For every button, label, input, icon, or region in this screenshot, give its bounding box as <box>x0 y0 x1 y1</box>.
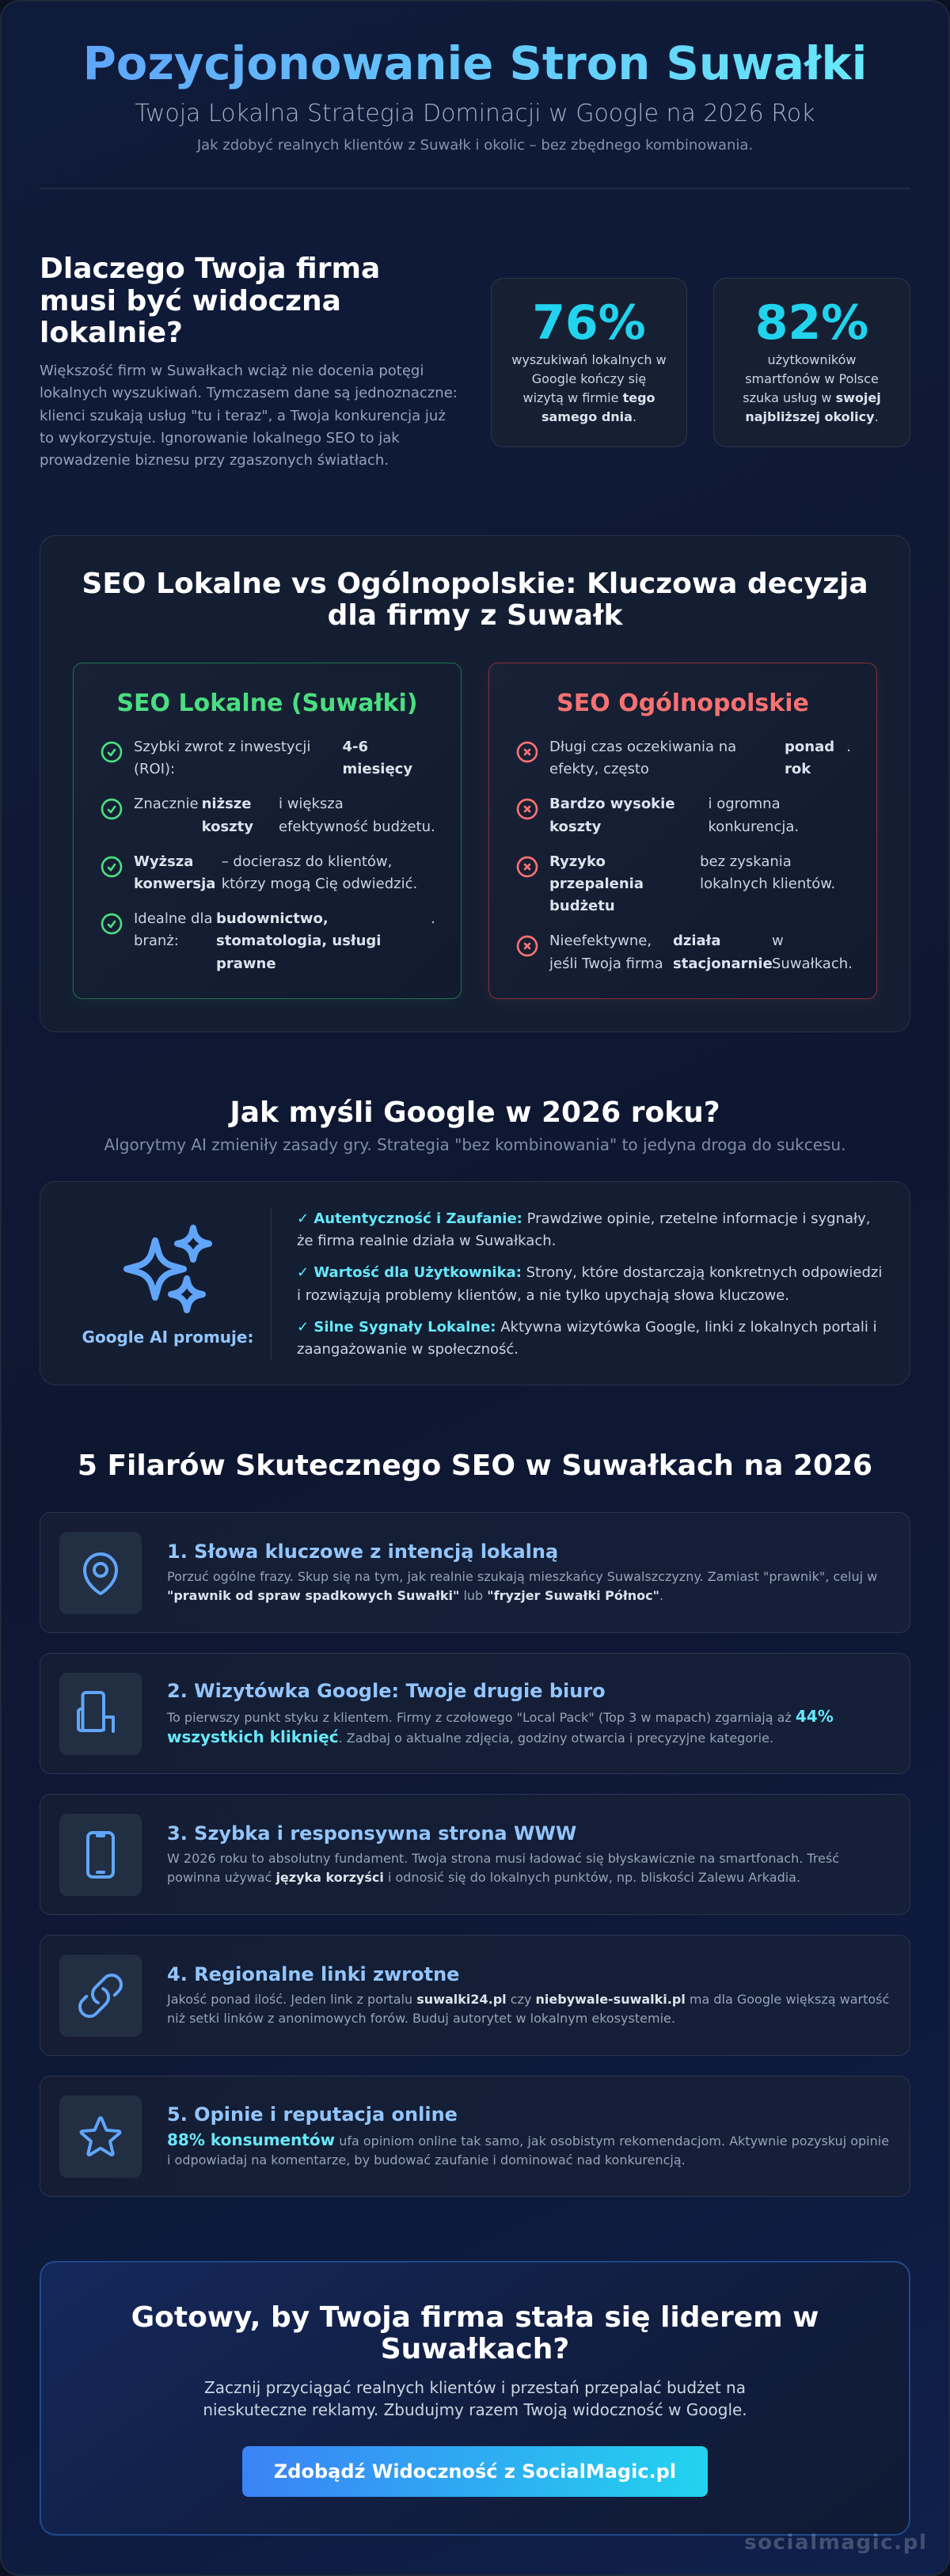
label: Google AI: Google AI promuje: <box>82 1328 253 1347</box>
stat card: 76% <box>491 278 687 447</box>
list: national SEO drawbacks: Bardzo wysokie koszty <box>549 796 675 835</box>
card: pillar 4: Jakość ponad ilość. Jeden link z portalu suwalki24.pl czy niebywale-suwalki.pl ma dla Google większą wartość niż setki linków z anonimowych forów. Buduj autorytet w lokalnym ekosystemie. <box>167 1992 889 2026</box>
stat card: 76%: 76% <box>532 295 646 351</box>
list: what Google AI promotes: ✓ Autentyczność i Zaufanie: Prawdziwe opinie, rzetelne informacje i sygnały, że firma realnie działa w Suwałkach. <box>297 1210 871 1249</box>
list: local SEO benefits: 4-6 miesięcy <box>342 739 412 777</box>
list: national SEO drawbacks: ponad rok <box>785 739 834 777</box>
icon: smartphone <box>59 1813 142 1895</box>
list: local SEO benefits <box>101 739 435 972</box>
stat card: 82% <box>713 278 910 447</box>
icon: map pin <box>59 1531 142 1613</box>
heading: SEO comparison: SEO Lokalne vs Ogólnopolskie: Kluczowa decyzja dla firmy z Suwałk <box>82 568 868 632</box>
stat card: 82%: użytkowników smartfonów w Polsce szuka usług w swojej najbliższej okolicy. <box>743 352 881 424</box>
heading: five pillars: 5 Filarów Skutecznego SEO w Suwałkach na 2026 <box>78 1449 872 1482</box>
card: pillar 3 <box>40 1794 910 1915</box>
card: pillar 4 <box>40 1935 910 2056</box>
icon: star <box>59 2095 142 2177</box>
watermark: socialmagic.pl <box>744 2531 928 2555</box>
list: national SEO drawbacks: w Suwałkach. <box>772 933 853 972</box>
panel: SEO comparison <box>40 535 910 1032</box>
subheading: Google 2026: Algorytmy AI zmieniły zasady gry. Strategia "bez kombinowania" to jedyna droga do sukcesu. <box>104 1135 846 1154</box>
list: national SEO drawbacks: Ryzyko przepalenia budżetu <box>549 853 644 914</box>
heading: call to action: Gotowy, by Twoja firma stała się liderem w Suwałkach? <box>131 2301 819 2365</box>
heading: national SEO: SEO Ogólnopolskie <box>557 690 809 717</box>
card: pillar 2 <box>40 1653 910 1774</box>
list: local SEO benefits: budownictwo, stomatologia, usługi prawne <box>216 910 381 972</box>
stat card: 82%: 82% <box>755 295 868 351</box>
list: local SEO benefits: Idealne dla branż: <box>134 910 213 949</box>
card: pillar 1 <box>40 1512 910 1633</box>
list: national SEO drawbacks <box>516 739 853 972</box>
card: pillar 5 <box>40 2076 910 2197</box>
icon: sparkles <box>124 1225 212 1313</box>
list: what Google AI promotes <box>297 1210 882 1358</box>
stat card: 76%: wyszukiwań lokalnych w Google kończy się wizytą w firmie tego samego dnia. <box>511 352 667 424</box>
heading: local SEO: SEO Lokalne (Suwałki) <box>116 690 418 717</box>
title: Pozycjonowanie Stron Suwałki <box>83 37 867 90</box>
card: pillar 5: 5. Opinie i reputacja online <box>167 2103 458 2126</box>
list: national SEO drawbacks: działa stacjonarnie <box>673 933 773 972</box>
list: local SEO benefits: . <box>431 910 435 927</box>
card: pillar 3: 3. Szybka i responsywna strona WWW <box>167 1822 576 1845</box>
text block: call to action: Zacznij przyciągać realnych klientów i przestań przepalać budżet na nieskuteczne reklamy. Zbudujmy razem Twoją widoczność w Google. <box>203 2378 747 2419</box>
panel: call to action <box>40 2261 910 2536</box>
tagline: Jak zdobyć realnych klientów z Suwałk i okolic – bez zbędnego kombinowania. <box>197 137 753 154</box>
card: pillar 2: 2. Wizytówka Google: Twoje drugie biuro <box>167 1680 606 1702</box>
list: national SEO drawbacks: Długi czas oczekiwania na efekty, często <box>549 739 736 777</box>
list: what Google AI promotes: ✓ Wartość dla Użytkownika: Strony, które dostarczają konkretnych odpowiedzi i rozwiązują problemy klientów, a nie tylko upychają słowa kluczowe. <box>297 1264 882 1304</box>
icon: link <box>59 1954 142 2036</box>
list: national SEO drawbacks: i ogromna konkurencja. <box>708 796 799 835</box>
section heading: why local: Dlaczego Twoja firma musi być widoczna lokalnie? <box>40 253 380 349</box>
card: pillar 5: 88% konsumentów ufa opiniom online tak samo, jak osobistym rekomendacjom. Aktywnie pozyskuj opinie i odpowiadaj na komentarze, by budować zaufanie i dominować nad konkurencją. <box>167 2130 889 2168</box>
list: national SEO drawbacks: . <box>846 739 851 755</box>
list: local SEO benefits: Znacznie i większa efektywność budżetu. <box>134 796 435 835</box>
panel: Google AI <box>40 1181 910 1385</box>
list: local SEO benefits: Szybki zwrot z inwestycji (ROI): <box>134 739 310 777</box>
heading: Google 2026: Jak myśli Google w 2026 roku? <box>230 1096 720 1129</box>
button: call to action: Zdobądź Widoczność z SocialMagic.pl <box>274 2460 676 2483</box>
button: call to action <box>242 2446 708 2497</box>
list: local SEO benefits: niższe koszty <box>202 796 253 835</box>
list: national SEO drawbacks: Nieefektywne, jeśli Twoja firma <box>549 933 663 972</box>
text block: why local: Większość firm w Suwałkach wciąż nie docenia potęgi lokalnych wyszukiwań. Tymczasem dane są jednoznaczne: klienci szukają usług "tu i teraz", a Twoja konkurencja już to wykorzystuje. Ignorowanie lokalnego SEO to jak prowadzenie biznesu przy zgaszonych światłach. <box>40 363 458 469</box>
list: local SEO benefits: Wyższa konwersja <box>134 853 215 892</box>
subtitle: Twoja Lokalna Strategia Dominacji w Google na 2026 Rok <box>135 100 815 127</box>
card: pillar 1: Porzuć ogólne frazy. Skup się na tym, jak realnie szukają mieszkańcy Suwalszczyzny. Zamiast "prawnik", celuj w "prawnik od spraw spadkowych Suwałki" lub "fryzjer Suwałki Północ". <box>167 1569 877 1603</box>
list: what Google AI promotes: ✓ Silne Sygnały Lokalne: Aktywna wizytówka Google, linki z lokalnych portali i zaangażowanie w społeczność. <box>297 1319 877 1358</box>
icon: devices <box>59 1672 142 1754</box>
list: local SEO benefits: – docierasz do klientów, którzy mogą Cię odwiedzić. <box>222 853 417 892</box>
card: pillar 4: 4. Regionalne linki zwrotne <box>167 1963 459 1985</box>
card: pillar 1: 1. Słowa kluczowe z intencją lokalną <box>167 1541 558 1563</box>
panel: local SEO <box>73 663 462 999</box>
card: pillar 2: To pierwszy punkt styku z klientem. Firmy z czołowego "Local Pack" (Top 3 w mapach) zgarniają aż 44% wszystkich kliknięć. Zadbaj o aktualne zdjęcia, godziny otwarcia i precyzyjne kategorie. <box>167 1707 834 1746</box>
card: pillar 3: W 2026 roku to absolutny fundament. Twoja strona musi ładować się błyskawicznie na smartfonach. Treść powinna używać języka korzyści i odnosić się do lokalnych punktów, np. bliskości Zalewu Arkadia. <box>167 1851 839 1885</box>
panel: national SEO <box>488 663 877 999</box>
list: national SEO drawbacks: bez zyskania lokalnych klientów. <box>700 853 835 892</box>
